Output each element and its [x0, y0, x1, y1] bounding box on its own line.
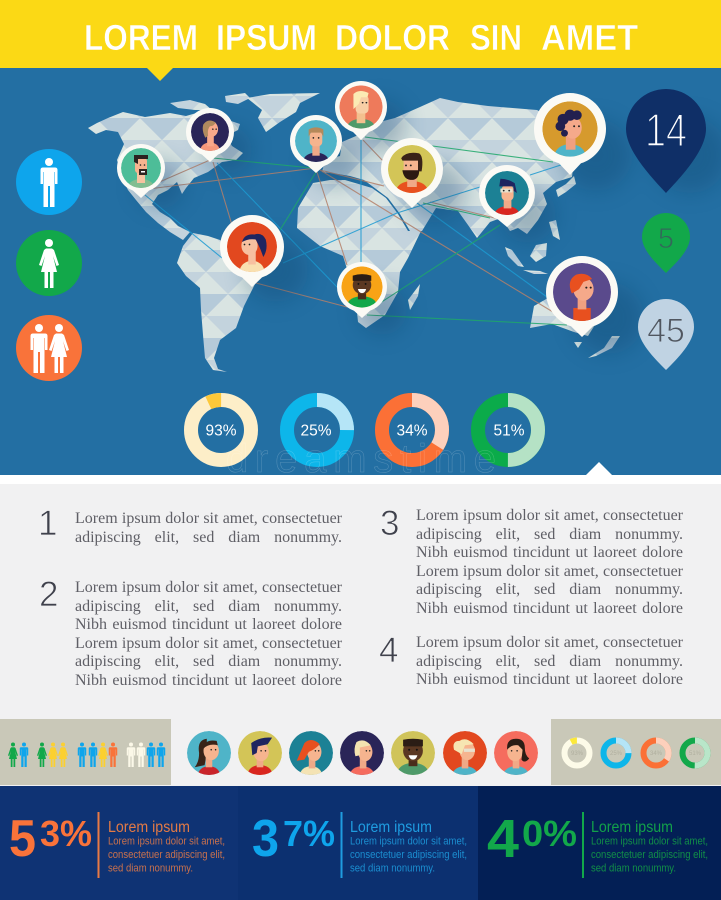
text block 2: Nibh euismod tincidunt ut laoreet dolore: [75, 672, 342, 688]
icon: woman circle: [16, 230, 82, 296]
small donut 51%: [682, 740, 708, 766]
text block 1: Lorem ipsum dolor sit amet, consectetuer: [75, 510, 342, 527]
stat panel: 37%: Lorem ipsum: [350, 819, 432, 836]
stat panel: 40%: sed diam nonummy.: [591, 862, 676, 874]
title: DOLOR: [335, 17, 450, 58]
connection lines: [141, 137, 567, 325]
donut: 51%: [478, 400, 538, 460]
marker: 14: [626, 89, 706, 193]
pin shadows: [136, 99, 721, 354]
pin: woman, navy: [186, 108, 234, 162]
text block 3: [416, 507, 683, 616]
header band: [0, 0, 721, 68]
icon: couple circle: [16, 315, 82, 381]
small donut 25%: [604, 740, 628, 766]
panel: world map background: [0, 68, 721, 475]
avatar: woman, dark hair, coral: [494, 731, 538, 775]
avatar: smiling man, dark skin: [391, 731, 435, 775]
small donut 34%: [644, 740, 668, 766]
pin: woman with ponytail, red: [220, 215, 284, 287]
text block 4: [416, 634, 683, 688]
small donut 25%: 25%: [610, 751, 623, 757]
pin: man with beard, green: [117, 144, 165, 198]
stat panel: 53%: Lorem ipsum: [108, 819, 190, 836]
donut: 34%: 34%: [396, 422, 428, 440]
stat panel: 53%: 3%: [40, 813, 92, 854]
stat panel: 37%: consectetuer adipiscing elit,: [350, 849, 467, 861]
panel: white band: [0, 475, 721, 484]
avatar: woman, brown hair: [187, 731, 231, 775]
text block 3: adipiscing elit, sed diam nonummy.: [416, 526, 683, 542]
small donut 34%: 34%: [650, 751, 663, 757]
world map: [88, 93, 620, 372]
marker: 5: [642, 213, 690, 273]
stat panel: 37%: [238, 786, 478, 900]
header pointer: [147, 68, 173, 81]
stat panel: 53%: 5: [9, 810, 36, 868]
text block 2: Nibh euismod tincidunt ut laoreet dolore: [75, 616, 342, 633]
donut: 25%: 25%: [300, 422, 332, 440]
stat panel: 37%: 3: [252, 810, 279, 868]
text block 4: Lorem ipsum dolor sit amet, consectetuer: [416, 634, 683, 651]
stat panel: 53%: consectetuer adipiscing elit,: [108, 849, 225, 861]
stat panel: 40%: 0%: [522, 813, 577, 854]
text block 3: Lorem ipsum dolor sit amet, consectetuer: [416, 562, 683, 580]
marker: 45: [638, 299, 694, 370]
text block 2: Lorem ipsum dolor sit amet, consectetuer: [75, 579, 342, 596]
text block 3: Nibh euismod tincidunt ut laoreet dolore: [416, 544, 683, 561]
title: LOREM: [84, 17, 198, 58]
stat panel: 40%: 4: [487, 809, 519, 869]
text block 2: [75, 579, 342, 688]
watermark: dreamstime: [226, 437, 496, 481]
donut: 51%: 51%: [493, 422, 525, 440]
stat panel: 37%: Lorem ipsum dolor sit amet,: [350, 836, 467, 848]
text block 3: Lorem ipsum dolor sit amet, consectetuer: [416, 507, 683, 524]
text block 4: adipiscing elit, sed diam nonummy.: [416, 652, 683, 670]
stat panel: 40%: [478, 786, 721, 900]
donut: 34%: [382, 400, 442, 460]
icon: man circle: [16, 149, 82, 215]
panel pointer: [586, 462, 612, 475]
small donut 93%: 93%: [571, 751, 584, 757]
avatar: man, navy hair: [238, 731, 282, 775]
pin: man with beard, yellow: [381, 138, 443, 208]
donut: 93%: [181, 390, 261, 470]
number 3: 3: [380, 504, 399, 543]
pin: blond man, coral: [335, 81, 387, 140]
text block 4: Nibh euismod tincidunt ut laoreet dolore: [416, 671, 683, 688]
avatar: blond woman, navy: [340, 731, 384, 775]
pin: man, light teal: [290, 115, 342, 173]
stat panel: 40%: Lorem ipsum: [591, 819, 673, 836]
pin: man with glasses, teal: [479, 165, 535, 227]
pin: man, orange: [337, 262, 387, 318]
small donut 51%: 51%: [689, 751, 702, 757]
text block 2: adipiscing elit, sed diam nonummy.: [75, 653, 342, 670]
text block 2: Lorem ipsum dolor sit amet, consectetuer: [75, 634, 342, 652]
stat panel: 53%: sed diam nonummy.: [108, 862, 193, 874]
avatar: blonde woman with glasses: [443, 731, 487, 775]
text block 1: adipiscing elit, sed diam nonummy.: [75, 528, 342, 546]
title: AMET: [541, 17, 638, 58]
pin: man with red hair, purple: [546, 256, 618, 337]
text block 3: adipiscing elit, sed diam nonummy.: [416, 581, 683, 598]
marker: 14: 14: [645, 104, 687, 156]
avatar: woman, orange hair: [289, 731, 333, 775]
people strip: [0, 719, 171, 785]
stat panel: 37%: sed diam nonummy.: [350, 862, 435, 874]
marker: 5: 5: [658, 223, 674, 255]
pin: man with curly hair, gold: [534, 93, 606, 175]
title: IPSUM: [216, 17, 317, 58]
stat panel: 37%: 7%: [283, 813, 335, 854]
avatar row: [187, 731, 538, 775]
title: [84, 17, 638, 58]
text block 2: adipiscing elit, sed diam nonummy.: [75, 598, 342, 614]
donut: 25%: [287, 400, 347, 460]
small donuts strip: [551, 719, 721, 785]
small donut 93%: [560, 736, 594, 770]
donut: 93%: 93%: [205, 422, 237, 440]
text block 1: [75, 510, 342, 546]
number 1: 1: [38, 504, 57, 543]
number 2: 2: [39, 575, 58, 614]
stat panel: 53%: Lorem ipsum dolor sit amet,: [108, 836, 225, 848]
title: SIN: [470, 17, 522, 58]
text block 3: Nibh euismod tincidunt ut laoreet dolore: [416, 600, 683, 616]
stat panel: 53%: [0, 786, 238, 900]
number 4: 4: [379, 631, 398, 670]
marker: 45: 45: [647, 312, 685, 350]
